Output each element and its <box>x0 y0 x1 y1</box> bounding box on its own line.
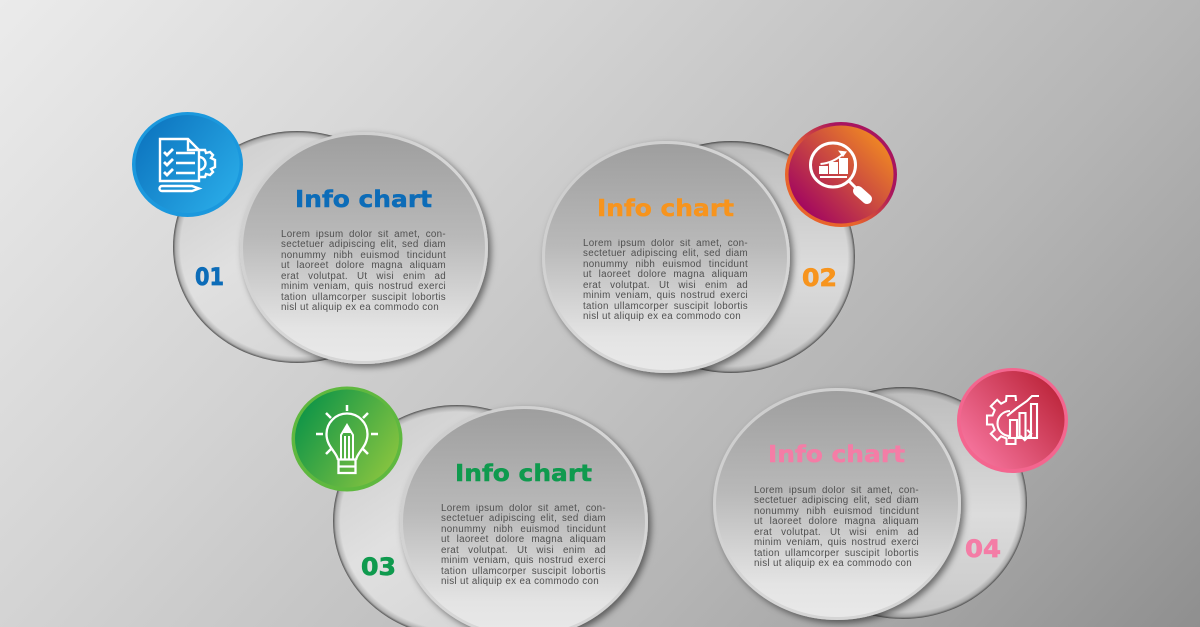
front disc <box>544 142 788 372</box>
back disc <box>779 387 1027 619</box>
number 01: 01 <box>195 263 224 291</box>
number 02: 02 <box>802 264 837 292</box>
heading: Info chart <box>455 459 592 487</box>
text block: tation ullamcorper suscipit lobortis <box>281 292 446 303</box>
text block <box>281 230 451 316</box>
panel: card 01 <box>132 112 486 363</box>
heading: Info chart <box>768 440 905 468</box>
text block: erat volutpat. Ut wisi enim ad <box>754 527 919 538</box>
icon: gear with rising bars <box>957 368 1068 473</box>
heading: Info chart <box>295 185 432 213</box>
text block: minim veniam, quis nostrud exerci <box>281 281 446 292</box>
text block: sectetuer adipiscing elit, sed diam <box>441 513 606 524</box>
text block: nisl ut aliquip ex ea commodo con <box>281 302 439 313</box>
text block: minim veniam, quis nostrud exerci <box>441 555 606 566</box>
text block: nisl ut aliquip ex ea commodo con <box>441 576 599 587</box>
front disc <box>714 390 960 618</box>
front disc <box>402 408 646 627</box>
back disc <box>173 131 421 363</box>
text block: nonummy nibh euismod tincidunt <box>754 506 919 517</box>
icon: magnifier with bar chart <box>785 122 897 227</box>
text block: tation ullamcorper suscipit lobortis <box>583 301 748 312</box>
front disc <box>242 134 486 362</box>
text block <box>441 504 611 590</box>
text block: ut laoreet dolore magna aliquam <box>441 534 606 545</box>
text block: tation ullamcorper suscipit lobortis <box>441 566 606 577</box>
text block: minim veniam, quis nostrud exerci <box>754 537 919 548</box>
text block: ut laoreet dolore magna aliquam <box>754 516 919 527</box>
text block <box>754 486 924 572</box>
text block: nonummy nibh euismod tincidunt <box>281 250 446 261</box>
panel: card 02 <box>544 122 897 373</box>
text block: erat volutpat. Ut wisi enim ad <box>583 280 748 291</box>
number 03: 03 <box>361 553 396 581</box>
back disc <box>607 141 855 373</box>
text block: minim veniam, quis nostrud exerci <box>583 290 748 301</box>
panel: card 03 <box>292 386 646 627</box>
text block: tation ullamcorper suscipit lobortis <box>754 548 919 559</box>
panel: card 04 <box>714 368 1068 619</box>
text block: nonummy nibh euismod tincidunt <box>441 524 606 535</box>
text block: nisl ut aliquip ex ea commodo con <box>754 558 912 569</box>
text block: sectetuer adipiscing elit, sed diam <box>754 495 919 506</box>
text block: ut laoreet dolore magna aliquam <box>583 269 748 280</box>
text block <box>583 239 753 325</box>
number 04: 04 <box>965 535 1001 563</box>
text block: sectetuer adipiscing elit, sed diam <box>583 248 748 259</box>
text block: erat volutpat. Ut wisi enim ad <box>281 271 446 282</box>
heading: Info chart <box>597 194 734 222</box>
back disc <box>333 405 581 627</box>
text block: erat volutpat. Ut wisi enim ad <box>441 545 606 556</box>
icon: checklist document with gear <box>132 112 243 217</box>
text block: nisl ut aliquip ex ea commodo con <box>583 311 741 322</box>
text block: sectetuer adipiscing elit, sed diam <box>281 239 446 250</box>
text block: ut laoreet dolore magna aliquam <box>281 260 446 271</box>
text block: nonummy nibh euismod tincidunt <box>583 259 748 270</box>
icon: light bulb with pencil <box>292 386 402 492</box>
